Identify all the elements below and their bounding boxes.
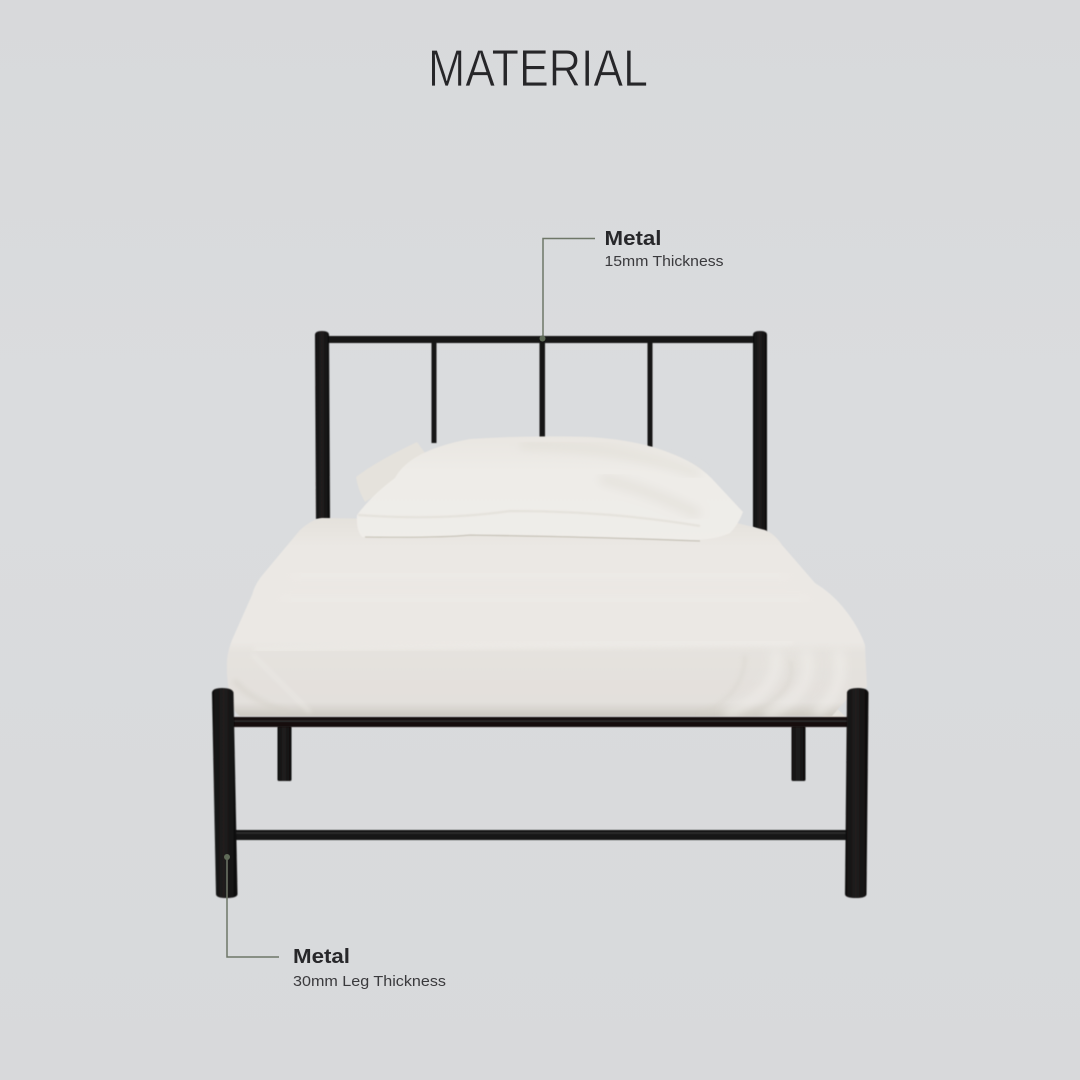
gap behind mattress corner (822, 708, 846, 717)
bed illustration (212, 331, 868, 898)
callout: headboard metal: 15mm Thickness (604, 253, 724, 270)
pillow seam and shading (358, 445, 700, 541)
front rails (232, 717, 848, 840)
mattress (227, 518, 867, 716)
callout: headboard metal (540, 228, 724, 342)
callout: headboard metal: Metal (604, 228, 662, 250)
title: MATERIAL (428, 40, 648, 98)
headboard frame (315, 331, 767, 533)
callout: leg metal: Metal (293, 946, 350, 968)
callout: leg metal: 30mm Leg Thickness (293, 973, 446, 990)
callout: leg metal (224, 854, 446, 990)
pillow (356, 436, 743, 541)
rear legs (278, 726, 806, 781)
front legs (212, 688, 868, 898)
mattress folds (234, 575, 840, 716)
